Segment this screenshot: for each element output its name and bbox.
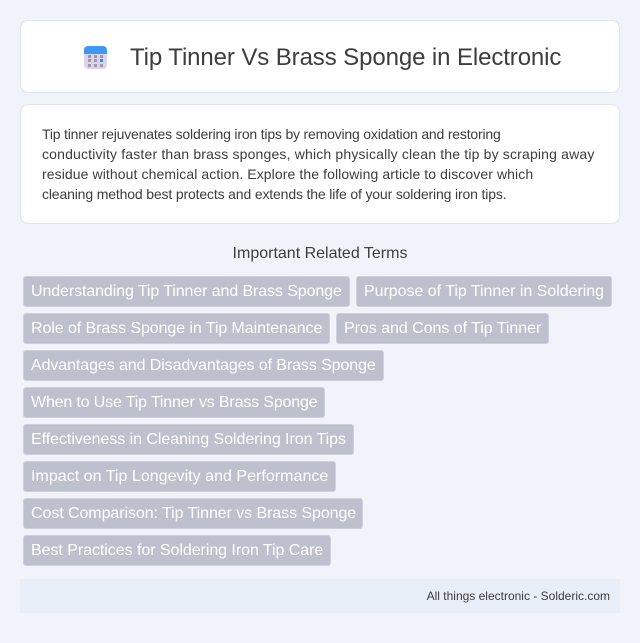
tag [23, 350, 384, 381]
tag [23, 461, 336, 492]
tag [356, 276, 612, 307]
intro text: residue without chemical action. Explore the following article to discover which [42, 166, 533, 182]
tag [23, 498, 363, 529]
tag: Purpose of Tip Tinner in Soldering [364, 283, 604, 300]
section heading: Important Related Terms [233, 245, 407, 262]
tag [23, 276, 350, 307]
tag: Best Practices for Soldering Iron Tip Care [31, 542, 323, 559]
intro text: cleaning method best protects and extends the life of your soldering iron tips. [42, 186, 506, 202]
tag: Pros and Cons of Tip Tinner [344, 320, 541, 337]
tag [336, 313, 549, 344]
tag [23, 387, 325, 418]
footer [20, 579, 620, 613]
intro text panel [20, 104, 620, 224]
tag: Advantages and Disadvantages of Brass Sponge [31, 357, 376, 374]
icon: calendar [84, 46, 107, 69]
intro text [42, 126, 595, 202]
header card [20, 20, 620, 93]
tag: Understanding Tip Tinner and Brass Sponge [31, 283, 342, 300]
intro text: Tip tinner rejuvenates soldering iron tips by removing oxidation and restoring [42, 126, 501, 142]
tag [23, 313, 330, 344]
tag [23, 535, 331, 566]
tag: Effectiveness in Cleaning Soldering Iron Tips [31, 431, 346, 448]
tag [23, 424, 354, 455]
tag: Cost Comparison: Tip Tinner vs Brass Sponge [31, 505, 356, 522]
title: Tip Tinner Vs Brass Sponge in Electronic [130, 44, 561, 71]
tag: When to Use Tip Tinner vs Brass Sponge [31, 394, 318, 411]
intro text: conductivity faster than brass sponges, which physically clean the tip by scraping away [42, 146, 595, 162]
tag: Role of Brass Sponge in Tip Maintenance [31, 320, 322, 337]
tag: Impact on Tip Longevity and Performance [31, 468, 328, 485]
footer text: All things electronic - Solderic.com [427, 589, 610, 603]
tag list [23, 276, 612, 566]
